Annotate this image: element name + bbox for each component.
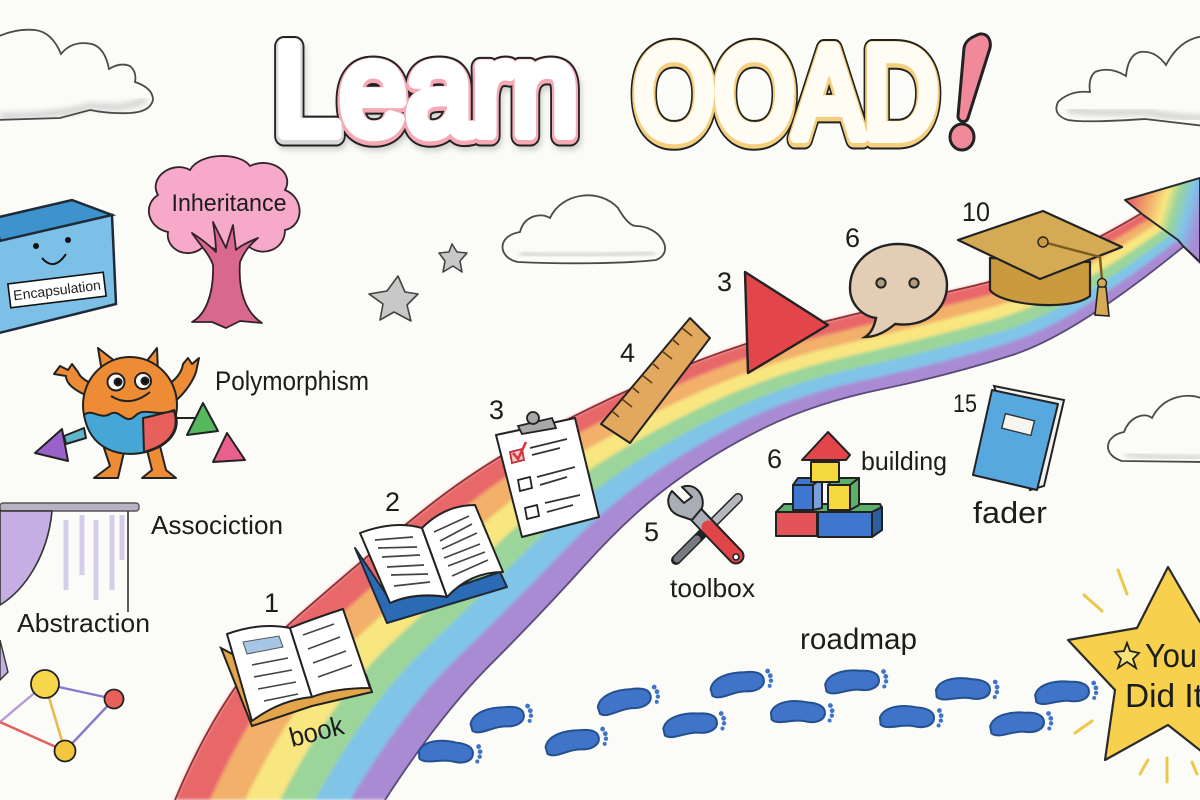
- step 1: book: 1: [264, 588, 279, 618]
- rainbow road: [175, 178, 1200, 800]
- polymorphism monster: [35, 348, 245, 478]
- step 1: book: book: [286, 710, 347, 753]
- label: polymorphism: Polymorphism: [215, 366, 369, 396]
- you did it star: [1068, 567, 1200, 782]
- legs: [94, 448, 124, 478]
- title word: Learn: Learn: [274, 18, 578, 164]
- step 2: open book: [355, 487, 507, 623]
- arms: [54, 364, 96, 396]
- title word: Learn: Learn: [274, 18, 578, 164]
- step 4: ruler: [601, 318, 710, 443]
- label: fader: fader: [973, 495, 1047, 530]
- step 5: tools: 5: [644, 517, 659, 547]
- purple triangle: [35, 429, 68, 461]
- title word: Learn: Learn: [274, 16, 578, 162]
- small gray star: [439, 244, 467, 272]
- step 3: clipboard: [489, 395, 599, 537]
- arrow head: [1125, 178, 1200, 262]
- green triangle: [187, 403, 218, 435]
- horns: [98, 348, 158, 372]
- wrench: [668, 486, 739, 560]
- cloud: top left: [0, 30, 153, 120]
- footprints: [418, 668, 1099, 766]
- title word: Learn: Learn: [276, 22, 580, 168]
- step 2: open book: 2: [385, 487, 400, 517]
- title word: OOAD: OOAD: [634, 21, 938, 167]
- label: building: building: [861, 446, 947, 476]
- step 15: blue book: 15: [953, 390, 977, 418]
- inheritance tree: Inheritance: [172, 190, 286, 217]
- tail and connector: [64, 428, 86, 444]
- step 6: speech bubble: [845, 223, 947, 337]
- label: toolbox: toolbox: [670, 573, 755, 603]
- you did it star: Did It: [1125, 677, 1200, 714]
- encapsulation box: [0, 200, 116, 334]
- pink triangle: [213, 433, 245, 462]
- cloud: right: [1108, 396, 1200, 462]
- mini star: [1115, 643, 1139, 668]
- step 1: book: [221, 588, 372, 753]
- step 10: graduation cap: 10: [962, 197, 990, 227]
- step 15: blue book: [953, 386, 1064, 490]
- cloud: top right: [1056, 36, 1200, 126]
- step 3b: red triangle: [717, 267, 828, 373]
- step 4: ruler: 4: [620, 338, 635, 368]
- label: roadmap: roadmap: [800, 623, 917, 656]
- step 10: graduation cap: [958, 197, 1122, 316]
- title exclamation mark: [950, 34, 990, 150]
- encapsulation label: Encapsulation: [12, 277, 102, 303]
- step 3: clipboard: 3: [489, 395, 504, 425]
- large gray star: [369, 276, 418, 321]
- star rays: [1075, 570, 1197, 782]
- title word: OOAD: OOAD: [634, 19, 938, 165]
- step 6: speech bubble: 6: [845, 223, 860, 253]
- abstraction curtain: [0, 503, 139, 680]
- class network diagram: [0, 670, 124, 762]
- label: association: Associction: [151, 510, 283, 540]
- you did it star: You: [1145, 637, 1197, 674]
- title: [274, 16, 990, 168]
- label: abstraction: Abstraction: [17, 608, 150, 638]
- screwdriver: [676, 498, 738, 560]
- step 3b: red triangle: 3: [717, 267, 732, 297]
- gray stars: [369, 244, 467, 321]
- inheritance tree: [149, 156, 300, 328]
- step 6: building blocks: 6: [767, 444, 782, 474]
- step 6: building blocks: [767, 432, 882, 537]
- step 5: tools: [644, 486, 739, 560]
- cloud: middle: [502, 195, 665, 263]
- title word: OOAD: OOAD: [634, 21, 938, 167]
